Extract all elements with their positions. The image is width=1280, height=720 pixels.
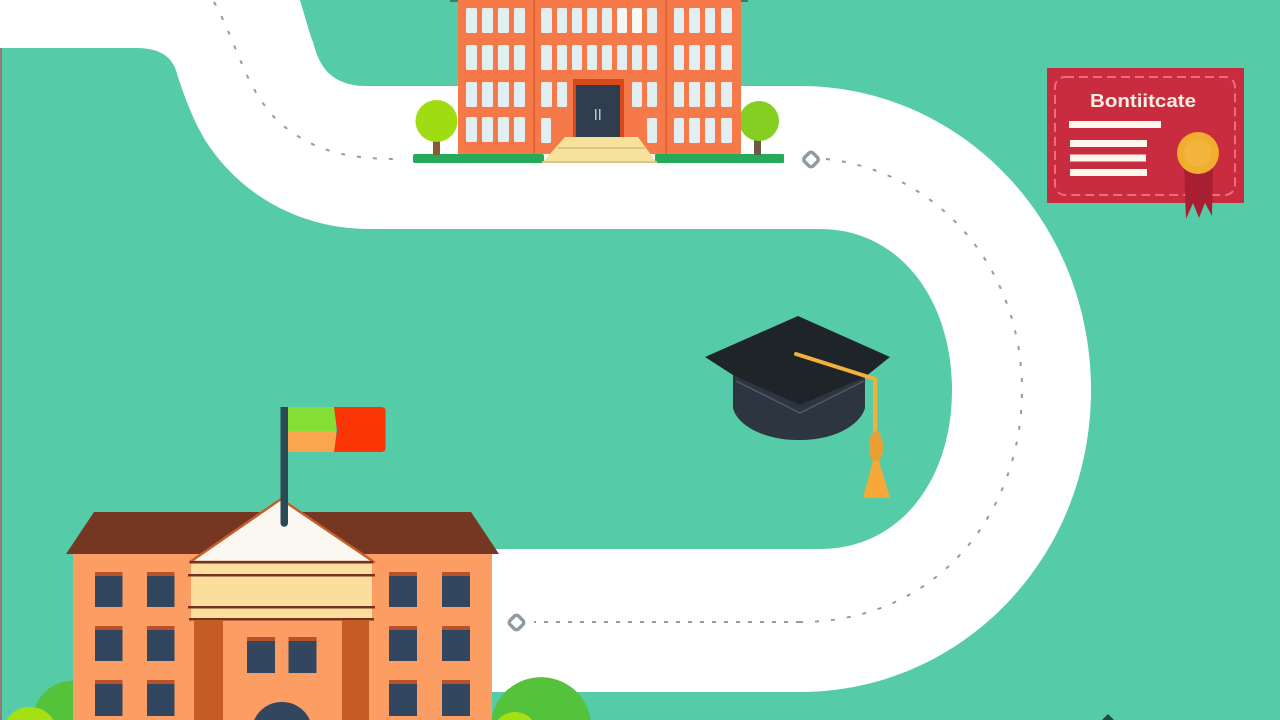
front steps	[542, 137, 657, 163]
lime bush right	[498, 712, 532, 720]
flag pole	[280, 407, 288, 527]
pediment	[190, 499, 374, 562]
arched door	[254, 702, 310, 720]
brick facade	[458, 0, 741, 154]
main roof	[66, 512, 499, 554]
tassel knot	[869, 431, 883, 463]
mortarboard	[705, 316, 890, 405]
ribbon	[1184, 165, 1213, 219]
gold seal	[1177, 132, 1219, 174]
upper school building	[413, 0, 784, 163]
certificate	[1047, 68, 1244, 219]
certificate text lines	[1069, 121, 1161, 176]
facade windows	[466, 8, 732, 143]
partial arrow marker at bottom edge	[1102, 714, 1114, 720]
dashed border	[1055, 77, 1235, 195]
cap base	[733, 372, 865, 440]
back bushes left	[33, 681, 111, 720]
lime bush left	[7, 707, 53, 720]
waypoint diamond: lower	[508, 614, 525, 631]
window lintels	[95, 572, 470, 684]
certificate title: Bontiitcate	[1090, 91, 1196, 111]
left tree	[416, 100, 458, 155]
lower school building	[7, 407, 591, 720]
grass strip	[413, 154, 784, 163]
graduation cap	[705, 316, 890, 498]
flag	[288, 407, 386, 452]
right tree	[739, 101, 779, 155]
building windows	[95, 572, 470, 716]
back bush right	[491, 677, 591, 720]
entrance door	[573, 79, 624, 137]
frieze bands	[188, 561, 375, 620]
building walls	[73, 554, 492, 720]
cap band highlight	[736, 381, 864, 413]
waypoint diamond: upper	[803, 151, 819, 168]
columns	[194, 620, 369, 720]
tassel fringe	[863, 461, 890, 498]
roof edge	[450, 0, 748, 2]
dotted route line	[214, 2, 1022, 622]
tassel cord	[796, 354, 875, 432]
